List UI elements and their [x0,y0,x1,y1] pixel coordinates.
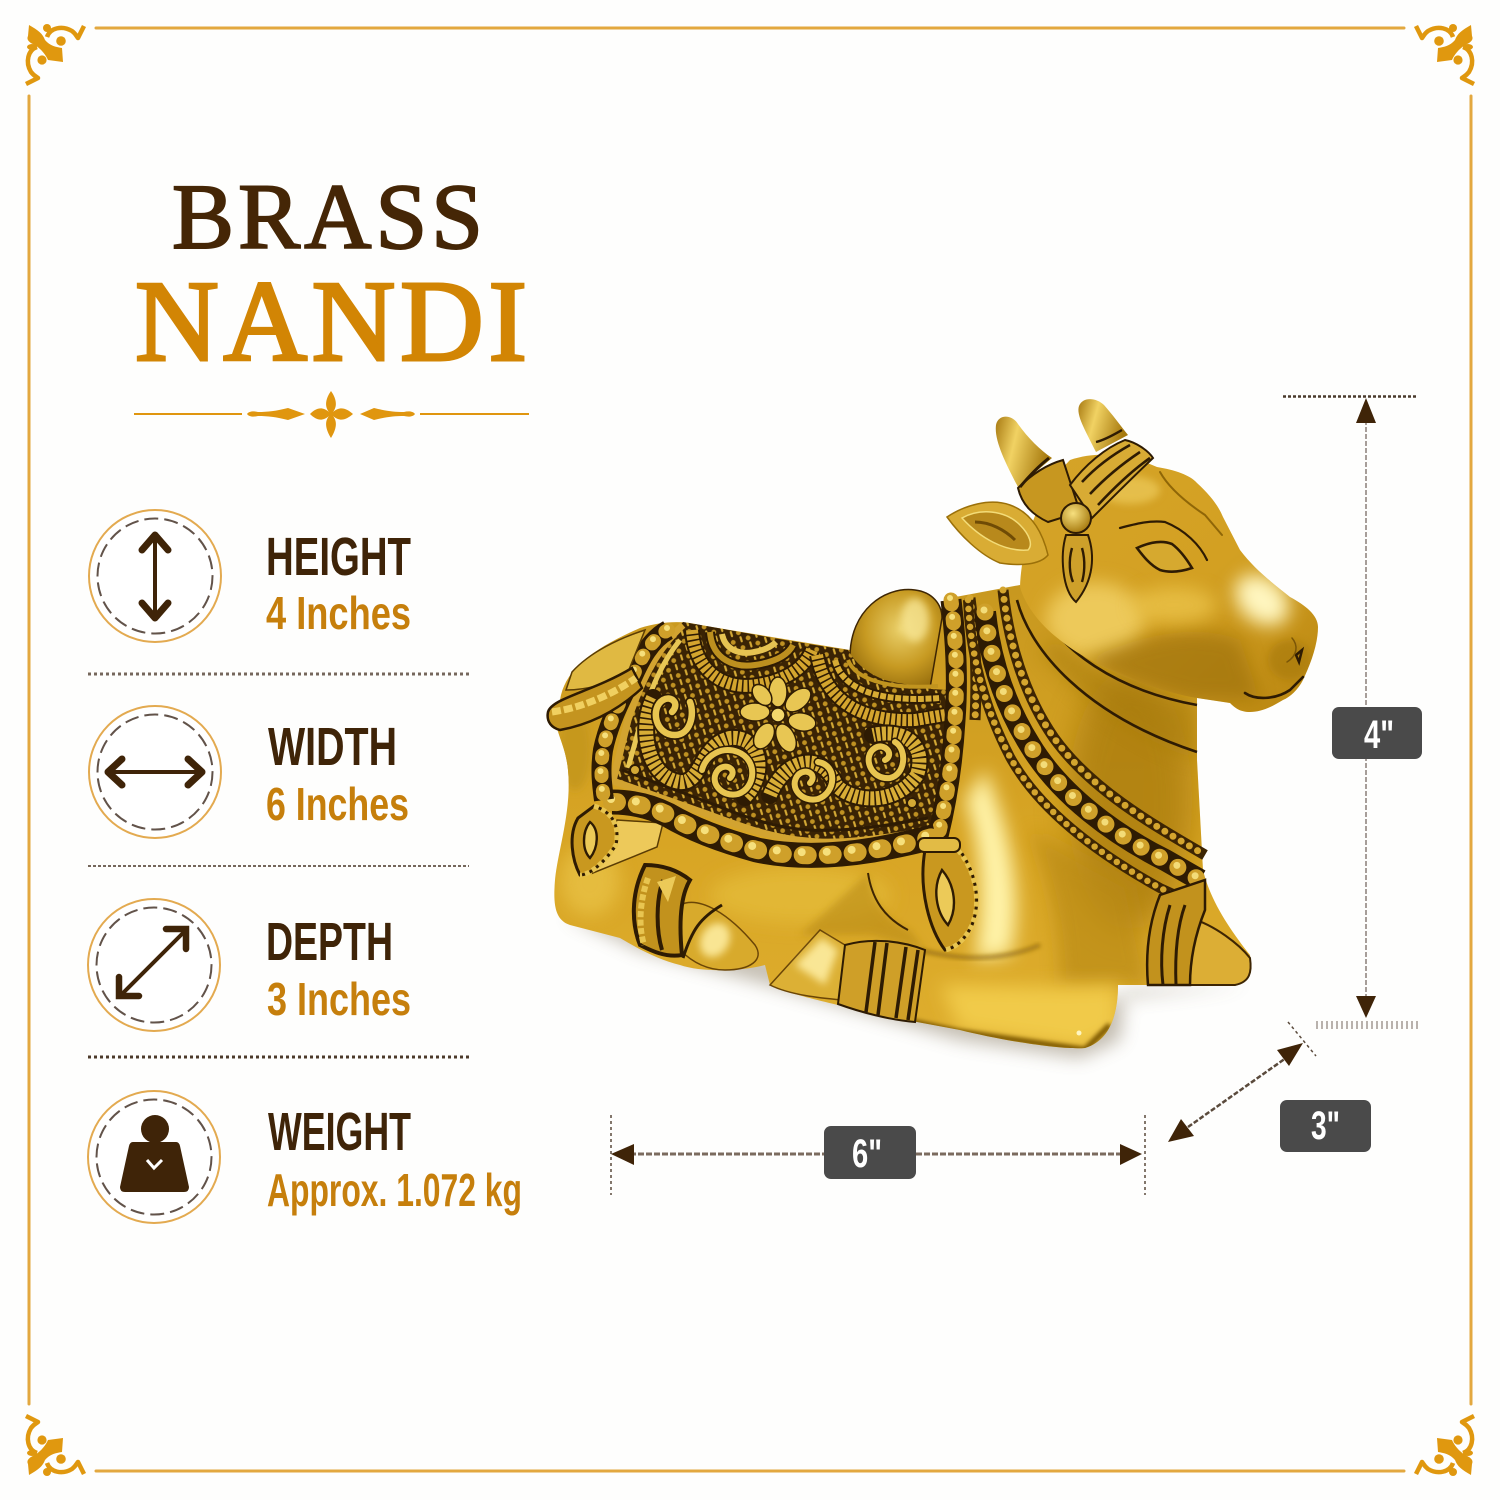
label: WEIGHT: WEIGHT [268,1102,411,1162]
body [554,585,1251,1050]
garland knot and front hoof [1147,880,1251,985]
blanket bottom border beads [611,799,936,855]
body fold behind tassel [868,873,908,930]
title line: BRASS: BRASS [172,166,483,269]
blanket inner rim [613,625,933,842]
ornate blanket [548,598,977,950]
icon: depth arrow [88,899,220,1031]
corner ornament: bottom right [1416,1416,1474,1476]
neck creases [1017,600,1197,752]
hind leg and hoof [634,865,758,970]
arrowhead upper right [1277,1043,1303,1066]
label: DEPTH: DEPTH [266,912,393,972]
brass Nandi statue illustration [548,399,1318,1058]
blanket rear border beads [600,628,668,800]
label: WIDTH: WIDTH [268,717,397,777]
ear [947,502,1048,564]
dimension: width [611,1115,1145,1195]
foreleg with bangles [770,930,1082,1036]
badge: 3 inch: 3" [1311,1104,1340,1148]
arrowhead right [1120,1144,1142,1165]
top arches [692,630,945,720]
face lines [1120,472,1303,698]
badge: 3 inch [1280,1100,1371,1152]
divider [88,865,469,867]
spec row: height [89,510,411,642]
badge: 4 inch: 4" [1364,713,1394,757]
spec row: width [89,706,409,838]
badge: 4 inch [1332,707,1422,759]
label: HEIGHT: HEIGHT [266,527,411,587]
flower motif [740,677,817,755]
scroll work [630,698,919,808]
arrowhead lower left [1168,1119,1194,1142]
value: 4 Inches: 4 Inches [266,587,411,639]
arrowhead up [1356,398,1376,423]
hump [850,590,942,688]
spec row: weight [88,1091,522,1223]
dimension: height [1283,396,1422,1025]
corner ornament: top right [1416,24,1474,84]
icon: weight [88,1091,220,1223]
value: Approx. 1.072 kg: Approx. 1.072 kg [267,1164,522,1216]
value: 3 Inches: 3 Inches [267,973,411,1025]
divider [88,1056,469,1058]
dimension: depth [1168,1022,1371,1152]
title [135,166,527,386]
ground shadow [565,915,1250,1058]
badge: 6 inch [824,1126,916,1179]
rear tassel [572,806,617,875]
blanket right border beads [937,598,976,836]
value: 6 Inches: 6 Inches [266,778,409,830]
badge: 6 inch: 6" [852,1132,882,1176]
head [1020,455,1318,715]
title line: NANDI: NANDI [135,258,527,386]
divider [88,672,469,676]
side tassel [918,838,977,950]
rump flap [548,630,645,730]
arrowhead down [1356,996,1376,1018]
icon: height arrow [89,510,221,642]
horns [996,399,1128,487]
neck garlands [968,590,1205,904]
icon: width arrow [89,706,221,838]
blanket base [613,622,948,843]
corner ornament: top left [26,24,84,84]
spec row: depth [88,899,411,1031]
corner ornament: bottom left [26,1416,84,1476]
rear fold under blanket [593,820,663,873]
title divider ornament [134,391,529,438]
arrowhead left [611,1144,634,1165]
headdress and forehead band [1018,440,1153,602]
